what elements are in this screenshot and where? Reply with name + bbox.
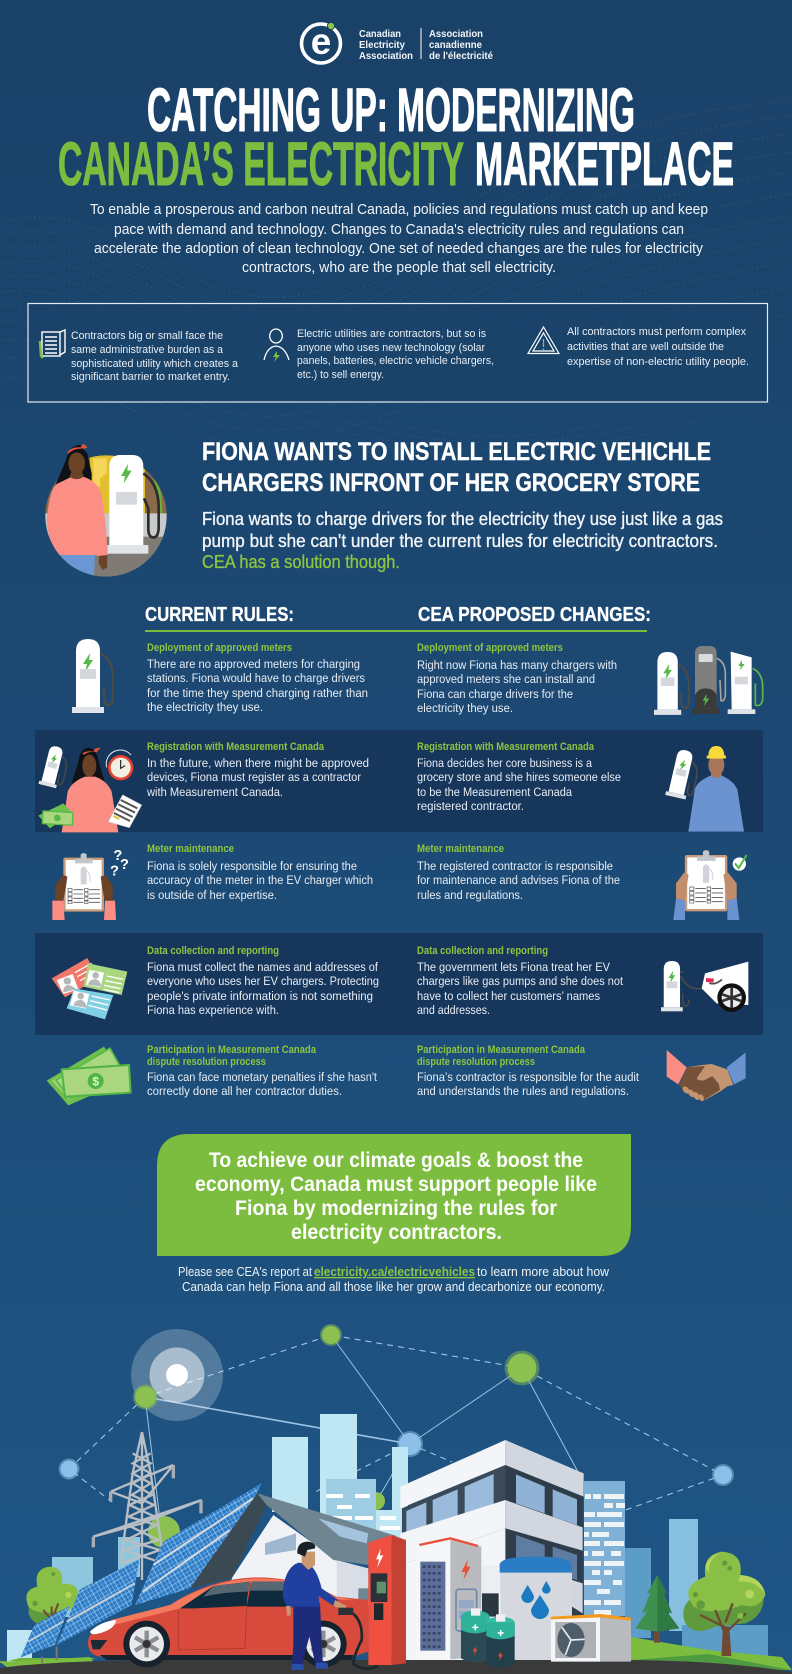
- rule: current dispute resolution: Participation in Measurement Canada: [147, 1044, 316, 1056]
- rule: current dispute resolution: correctly done all her contractor duties.: [147, 1084, 342, 1098]
- text: link to CEA report: Please see CEA's report at: [178, 1264, 312, 1279]
- callout: climate goals: electricity contractors.: [291, 1221, 502, 1244]
- rule: current registration: In the future, when there might be approved: [147, 756, 369, 770]
- logo: Canadian Electricity Association: [302, 21, 493, 63]
- heading: Fiona wants to install chargers: CHARGERS INFRONT OF HER GROCERY STORE: [202, 469, 700, 497]
- icon: contractor in hard hat with charger: [665, 746, 744, 832]
- change: proposed dispute resolution: Fiona’s contractor is responsible for the audit: [417, 1070, 640, 1084]
- icon: clipboard with question marks: ?: [113, 848, 122, 864]
- logo: Canadian Electricity Association: Association: [429, 29, 483, 40]
- rule: current meter maintenance: accuracy of the meter in the EV charger which: [147, 873, 373, 887]
- rule: current deployment of approved meters: the electricity they use.: [147, 700, 263, 714]
- change: proposed registration: Fiona decides her core business is a: [417, 756, 592, 770]
- icon: clipboard with question marks: [52, 848, 129, 920]
- icon: clipboard with question marks: ?: [120, 857, 129, 873]
- change: proposed dispute resolution: and understands the rules and regulations.: [417, 1084, 629, 1098]
- rule: current registration: with Measurement Canada.: [146, 785, 283, 799]
- icon: dollar bills: [47, 1047, 131, 1105]
- logo: Canadian Electricity Association: canadienne: [429, 40, 482, 51]
- icon: handshake: [667, 1050, 746, 1102]
- water tank: [500, 1557, 572, 1660]
- change: proposed data collection: The government lets Fiona treat her EV: [417, 960, 611, 974]
- column heading: CEA proposed changes: CEA PROPOSED CHANGES:: [418, 604, 651, 626]
- text: administrative burden: Contractors big or small face the: [71, 330, 223, 342]
- band: registration row background: [35, 730, 763, 832]
- intro paragraph: contractors, who are the people that sell electricity.: [242, 259, 556, 276]
- text: link to CEA report: [178, 1264, 610, 1294]
- text: Fiona's problem: pump but she can't under the current rules for electricity contractors.: [202, 531, 718, 551]
- solar panels: [21, 1483, 262, 1663]
- icon: EV charger: [72, 639, 113, 713]
- text: link to CEA report: Canada can help Fiona and all those like her grow and decarbonize our economy.: [182, 1279, 605, 1294]
- title: [58, 76, 734, 198]
- change: proposed deployment of approved meters: electricity they use.: [417, 701, 513, 715]
- rule: current meter maintenance: [147, 843, 373, 902]
- ground: [0, 1637, 792, 1674]
- intro paragraph: accelerate the adoption of clean technology. One set of needed changes are the rules for electricity: [94, 240, 703, 257]
- change: proposed meter maintenance: The registered contractor is responsible: [417, 859, 613, 873]
- icon: dollar bills: $: [92, 1074, 99, 1088]
- change: proposed meter maintenance: [417, 843, 620, 902]
- network nodes: [58, 1324, 734, 1548]
- change: proposed data collection: [417, 945, 624, 1017]
- illustration: clean energy city: [0, 1324, 792, 1674]
- rule: current registration: devices, Fiona must register as a contractor: [147, 770, 361, 784]
- rule: current deployment of approved meters: [147, 642, 368, 714]
- change: proposed registration: grocery store and she hires someone else: [417, 770, 621, 784]
- text: utilities are contractors: etc.) to sell energy.: [297, 369, 384, 381]
- text: administrative burden: sophisticated utility which creates a: [71, 358, 239, 370]
- rule: current data collection: Fiona must collect the names and addresses of: [147, 960, 379, 974]
- change: proposed registration: to be the Measurement Canada: [417, 785, 572, 799]
- rule: current registration: [146, 741, 369, 799]
- logo: Canadian Electricity Association: e: [311, 21, 331, 62]
- rule: current deployment of approved meters: stations. Fiona would have to charge drivers: [147, 671, 365, 685]
- text: link to CEA report: electricity.ca/electricvehicles: [314, 1264, 475, 1279]
- energy storage, tank, batteries, heat pump: [416, 1538, 765, 1668]
- house: [190, 1493, 397, 1607]
- text: complex activities: activities that are well outside the: [567, 341, 724, 353]
- band: data collection row background: [35, 933, 763, 1035]
- icon: clipboard with question marks: ?: [110, 864, 119, 880]
- change: proposed meter maintenance: Meter maintenance: [417, 843, 504, 855]
- pine tree: [635, 1575, 679, 1643]
- intro paragraph: pace with demand and technology. Changes to Canada's electricity rules and regulations can: [114, 221, 684, 238]
- column heading: current rules: CURRENT RULES:: [145, 604, 294, 626]
- icon: Fiona at the charger: [43, 443, 170, 580]
- red car: [88, 1577, 368, 1667]
- text: administrative burden: significant barrier to market entry.: [71, 371, 230, 383]
- logo: Canadian Electricity Association: Canadian: [359, 29, 401, 40]
- icon: documents: [40, 330, 65, 358]
- text: utilities are contractors: anyone who uses new technology (solar: [297, 342, 485, 354]
- man charging car: [283, 1542, 347, 1670]
- text: utilities are contractors: [297, 328, 494, 381]
- panel: contractor facts: [28, 304, 768, 402]
- network lines: [69, 1335, 723, 1520]
- rule: current data collection: [147, 945, 379, 1017]
- heat pump: [551, 1614, 631, 1662]
- change: proposed data collection: have to collect her customers’ names: [417, 989, 600, 1003]
- change: proposed data collection: and addresses.: [417, 1003, 490, 1017]
- change: proposed deployment of approved meters: Fiona can charge drivers for the: [417, 687, 573, 701]
- rule: current meter maintenance: Fiona is solely responsible for ensuring the: [147, 859, 357, 873]
- intro paragraph: [90, 201, 708, 276]
- heading: Fiona wants to install chargers: [202, 438, 711, 497]
- left tree: [26, 1567, 78, 1623]
- rule: current dispute resolution: [147, 1044, 378, 1098]
- icon: three chargers: [654, 646, 763, 715]
- change: proposed deployment of approved meters: Right now Fiona has many chargers with: [417, 658, 617, 672]
- change: proposed registration: registered contractor.: [417, 799, 524, 813]
- icon: warning triangle: [528, 327, 559, 354]
- icon: charger plugged into car: [661, 960, 748, 1012]
- text: Fiona's problem: CEA has a solution though.: [202, 552, 400, 572]
- text: utilities are contractors: Electric utilities are contractors, but so is: [297, 328, 486, 340]
- rule: current deployment of approved meters: for the time they spend charging rather than: [147, 686, 368, 700]
- rule: current data collection: Fiona has experience with.: [147, 1003, 279, 1017]
- EV charging station: [338, 1535, 406, 1669]
- text: administrative burden: [71, 330, 239, 383]
- office building: [400, 1440, 584, 1660]
- logo: Canadian Electricity Association: de l'électricité: [429, 51, 493, 62]
- rule: current data collection: Data collection and reporting: [147, 945, 279, 957]
- change: proposed deployment of approved meters: Deployment of approved meters: [417, 642, 563, 654]
- change: proposed dispute resolution: dispute resolution process: [417, 1056, 535, 1068]
- icon: clipboard with check mark: [673, 850, 747, 920]
- logo: Canadian Electricity Association: Electricity: [359, 40, 405, 51]
- title: CANADA’S ELECTRICITY: [58, 130, 464, 198]
- rule: current data collection: everyone who uses her EV chargers. Protecting: [147, 974, 379, 988]
- callout: climate goals: To achieve our climate goals & boost the: [209, 1149, 583, 1172]
- change: proposed registration: Registration with Measurement Canada: [417, 741, 594, 753]
- rule: current dispute resolution: Fiona can face monetary penalties if she hasn't: [147, 1070, 378, 1084]
- icon: Fiona with paperwork, clock and money: [38, 744, 142, 832]
- rule: current deployment of approved meters: Deployment of approved meters: [147, 642, 292, 654]
- change: proposed registration: [417, 741, 621, 813]
- logo: Canadian Electricity Association: Association: [359, 51, 413, 62]
- change: proposed dispute resolution: [417, 1044, 640, 1098]
- rule: current registration: Registration with Measurement Canada: [147, 741, 324, 753]
- callout: climate goals: [157, 1134, 631, 1256]
- text: complex activities: All contractors must perform complex: [567, 326, 746, 338]
- change: proposed data collection: chargers like gas pumps and she does not: [417, 974, 624, 988]
- change: proposed meter maintenance: for maintenance and advises Fiona of the: [417, 873, 620, 887]
- background skyline: [7, 1414, 768, 1662]
- callout: climate goals: Fiona by modernizing the rules for: [235, 1197, 557, 1220]
- text: complex activities: [567, 326, 749, 368]
- text: link to CEA report: to learn more about how: [477, 1264, 610, 1279]
- change: proposed deployment of approved meters: [417, 642, 617, 715]
- change: proposed dispute resolution: Participation in Measurement Canada: [417, 1044, 585, 1056]
- rule: current data collection: people's private information is not something: [147, 989, 373, 1003]
- batteries: [461, 1608, 515, 1668]
- text: utilities are contractors: panels, batteries, electric vehicle chargers,: [297, 355, 494, 367]
- text: Fiona's problem: Fiona wants to charge drivers for the electricity they use just like a gas: [202, 509, 723, 529]
- rule: current deployment of approved meters: There are no approved meters for charging: [147, 657, 360, 671]
- text: Fiona's problem: [202, 509, 723, 572]
- beacon: [131, 1329, 223, 1421]
- rule: current meter maintenance: Meter maintenance: [147, 843, 234, 855]
- round tree: [683, 1552, 765, 1656]
- text: complex activities: expertise of non-electric utility people.: [567, 356, 749, 368]
- callout: climate goals: economy, Canada must support people like: [195, 1173, 597, 1196]
- text: administrative burden: same administrative burden as a: [71, 344, 224, 356]
- heading: Fiona wants to install chargers: FIONA WANTS TO INSTALL ELECTRIC VEHICHLE: [202, 438, 711, 466]
- change: proposed data collection: Data collection and reporting: [417, 945, 548, 957]
- transmission tower: [93, 1432, 202, 1580]
- rule: current dispute resolution: dispute resolution process: [147, 1056, 266, 1068]
- icon: ID cards: [52, 958, 127, 1019]
- intro paragraph: To enable a prosperous and carbon neutral Canada, policies and regulations must catch up and keep: [90, 201, 708, 218]
- rule: current meter maintenance: is outside of her expertise.: [147, 888, 277, 902]
- change: proposed meter maintenance: rules and regulations.: [417, 888, 523, 902]
- change: proposed deployment of approved meters: approved meters she can install and: [417, 672, 595, 686]
- storage unit: [416, 1538, 481, 1659]
- icon: person with bolt: [264, 329, 289, 362]
